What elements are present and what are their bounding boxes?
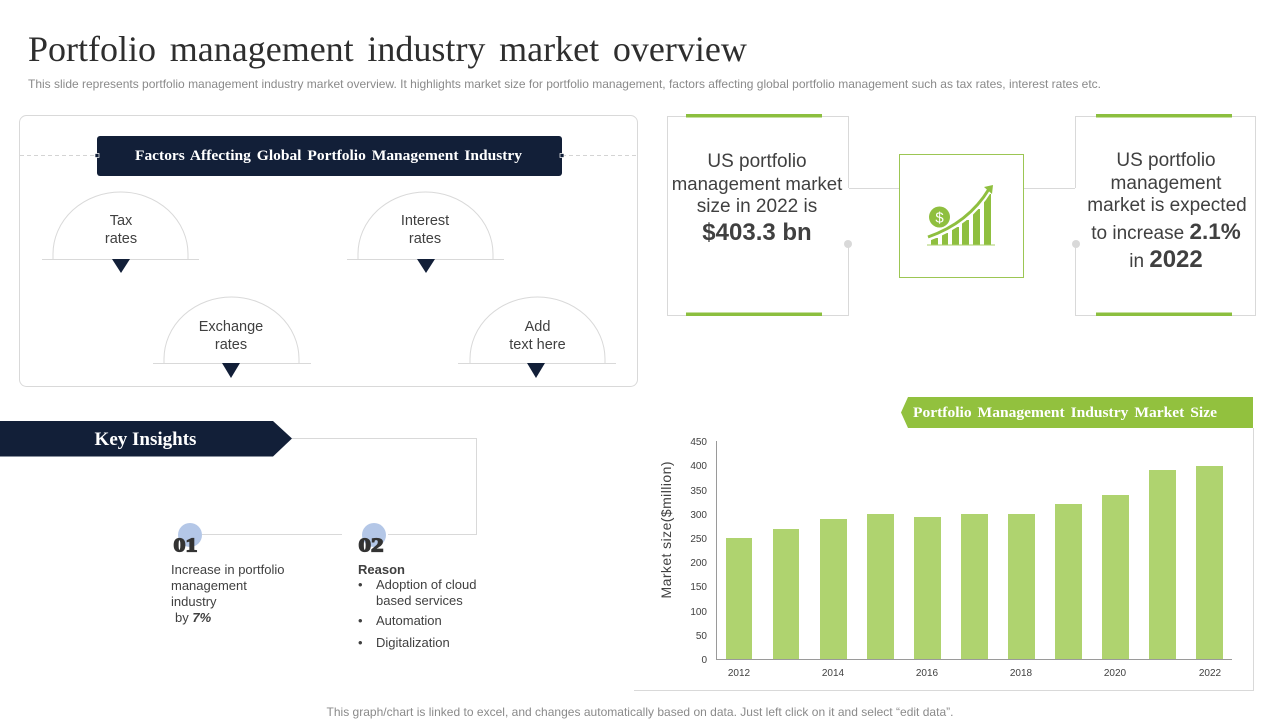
insight 01: management [171, 578, 247, 593]
y axis ticks: 300 [690, 510, 707, 521]
insight 01 [171, 523, 284, 625]
insight 02: Reason [358, 562, 405, 577]
y axis ticks: 250 [690, 534, 707, 545]
panel: factors affecting industry [20, 116, 638, 386]
insight 01: Increase in portfolio [171, 562, 284, 577]
insight 02: based services [376, 593, 463, 608]
stat card: market size: US portfolio [707, 151, 807, 172]
factor: add text here: Add [525, 319, 550, 335]
stat card: market size: management market [672, 173, 843, 194]
subtitle: This slide represents portfolio management industry market overview. It highlights market size for portfolio management, factors affecting global portfolio management such as tax rates, interest rates etc. [28, 77, 1101, 91]
stat card: market size [668, 114, 852, 316]
factor: exchange rates: rates [215, 337, 247, 353]
insight 02: • [358, 635, 363, 650]
bars [726, 466, 1223, 659]
insight 02: • [358, 613, 363, 628]
axes [716, 441, 1232, 660]
y axis ticks: 350 [690, 486, 707, 497]
stat card: market size: size in 2022 is [697, 196, 817, 217]
y axis ticks: 200 [690, 558, 707, 569]
x axis labels: 2014 [822, 668, 845, 679]
connectors between cards and icon [849, 188, 1075, 190]
icon: growth chart with dollar coin: $ [935, 210, 944, 226]
panel heading: factors [95, 136, 564, 176]
y axis title: Market size($million) [658, 462, 674, 598]
insight 01: 01 [174, 534, 198, 556]
factor: exchange rates: Exchange [199, 319, 263, 335]
insight 02: Automation [376, 613, 442, 628]
factor: interest rates: rates [409, 231, 441, 247]
x axis labels [728, 668, 1222, 679]
insight 02: • [358, 577, 363, 592]
insight 02: Adoption of cloud [376, 577, 476, 592]
key insights banner: Key Insights [95, 429, 196, 450]
stat card: expected increase: management [1111, 173, 1222, 194]
factor: tax rates: Tax [110, 213, 133, 229]
footnote: This graph/chart is linked to excel, and changes automatically based on data. Just left click on it and select “edit data”. [326, 705, 954, 719]
insight 01: by 7% [175, 610, 212, 625]
y axis ticks: 50 [696, 631, 707, 642]
stat card: market size: $403.3 bn [702, 219, 812, 246]
insight 01: industry [171, 594, 217, 609]
factor: interest rates: Interest [401, 213, 449, 229]
stat card: expected increase: in 2022 [1129, 246, 1203, 273]
factor: tax rates [42, 192, 199, 273]
stat card: expected increase: to increase 2.1% [1091, 219, 1241, 244]
y axis ticks [690, 437, 707, 666]
chart heading banner: Portfolio Management Industry Market Size [913, 405, 1217, 421]
factor: add text here [458, 297, 616, 378]
factor: exchange rates [153, 297, 311, 378]
insights connector [202, 438, 476, 534]
factor: add text here: text here [509, 337, 566, 353]
insight 02 [358, 523, 476, 650]
key insights banner [0, 421, 292, 456]
x axis labels: 2018 [1010, 668, 1033, 679]
stat card: expected increase: US portfolio [1116, 150, 1216, 171]
stat card: expected increase: market is expected [1087, 195, 1247, 216]
y axis ticks: 100 [690, 607, 707, 618]
icon: growth chart with dollar coin [900, 154, 1024, 278]
y axis ticks: 150 [690, 582, 707, 593]
chart frame [634, 428, 1254, 690]
factor: tax rates: rates [105, 231, 137, 247]
x axis labels: 2012 [728, 668, 751, 679]
x axis labels: 2020 [1104, 668, 1127, 679]
y axis ticks: 0 [701, 655, 707, 666]
stat card: expected increase [1072, 114, 1256, 316]
y axis ticks: 450 [690, 437, 707, 448]
title: Portfolio management industry market overview [28, 29, 747, 69]
panel heading: factors: Factors Affecting Global Portfolio Management Industry [135, 148, 523, 164]
insight 02: 02 [358, 534, 384, 556]
x axis labels: 2016 [916, 668, 939, 679]
y axis ticks: 400 [690, 461, 707, 472]
x axis labels: 2022 [1199, 668, 1222, 679]
insight 02: Digitalization [376, 635, 450, 650]
chart heading banner [901, 397, 1253, 428]
bar chart: market size [658, 437, 1232, 679]
factor: interest rates [347, 192, 504, 273]
